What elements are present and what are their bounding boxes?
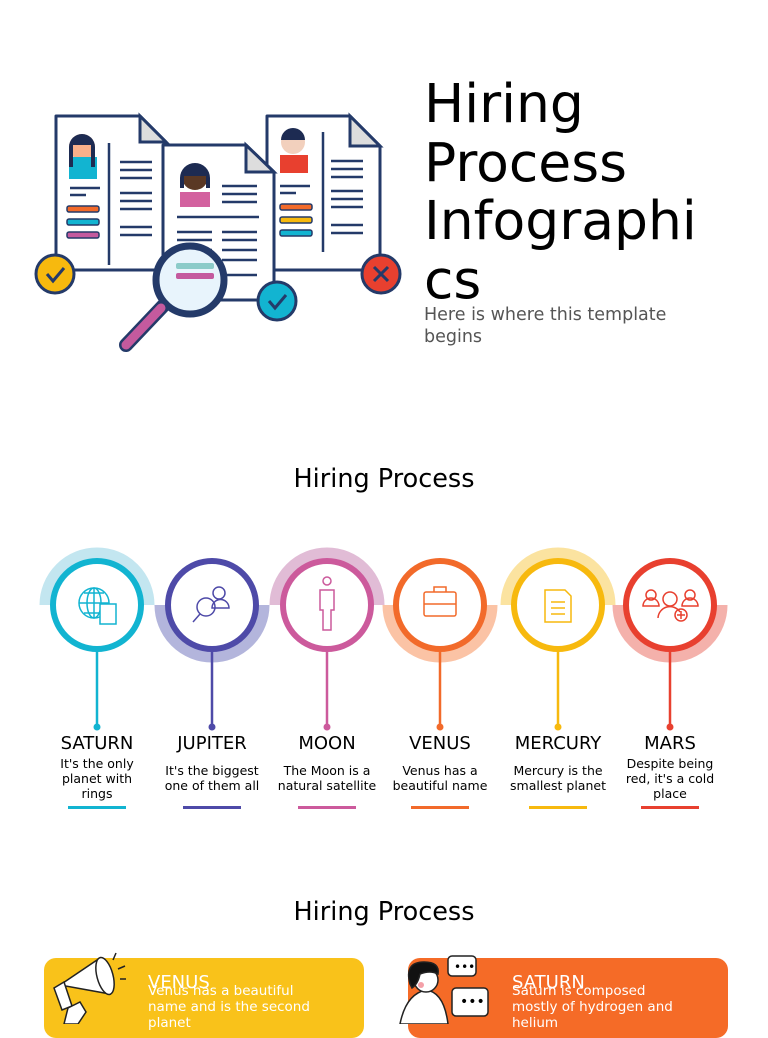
subtitle: Here is where this template begins [424,305,666,347]
card: saturn: SATURN [512,972,585,993]
card: venus [44,958,364,1038]
process timeline [40,548,728,730]
heading: hiring process 1: Hiring Process [293,464,474,494]
text: It's the only planet with rings [60,756,134,801]
item: saturn [60,733,134,809]
heading: hiring process 2: Hiring Process [293,897,474,927]
item: mars [626,733,714,809]
card: saturn [408,958,728,1038]
title: Hiring [424,72,584,135]
card: venus: VENUS [148,972,210,993]
text: JUPITER [177,733,247,754]
icon: woman with speech bubbles: ••• [460,994,485,1010]
item: mercury [510,733,606,809]
card: saturn: Saturn is composed mostly of hydrogen and helium [512,983,673,1031]
item: moon [278,733,376,809]
illustration: resumes with magnifier [34,112,402,352]
text: Mercury is the smallest planet [510,763,606,793]
text: VENUS [409,733,471,754]
text: MOON [298,733,356,754]
text: SATURN [61,733,133,754]
title: Infographi [424,189,697,252]
item: jupiter [165,733,259,809]
text: MERCURY [515,733,601,754]
title: cs [424,248,481,310]
text: Despite being red, it's a cold place [626,756,714,801]
text: MARS [644,733,696,754]
icon: woman with speech bubbles: ••• [454,960,475,974]
title: Process [424,130,627,194]
item: venus [393,733,487,809]
icon: megaphone [53,952,126,1024]
card: venus: Venus has a beautiful name and is the second planet [148,983,310,1031]
text: The Moon is a natural satellite [278,763,376,793]
icon: woman with speech bubbles [399,955,489,1024]
text: Venus has a beautiful name [393,763,487,793]
text: It's the biggest one of them all [165,763,259,793]
title [424,72,697,310]
